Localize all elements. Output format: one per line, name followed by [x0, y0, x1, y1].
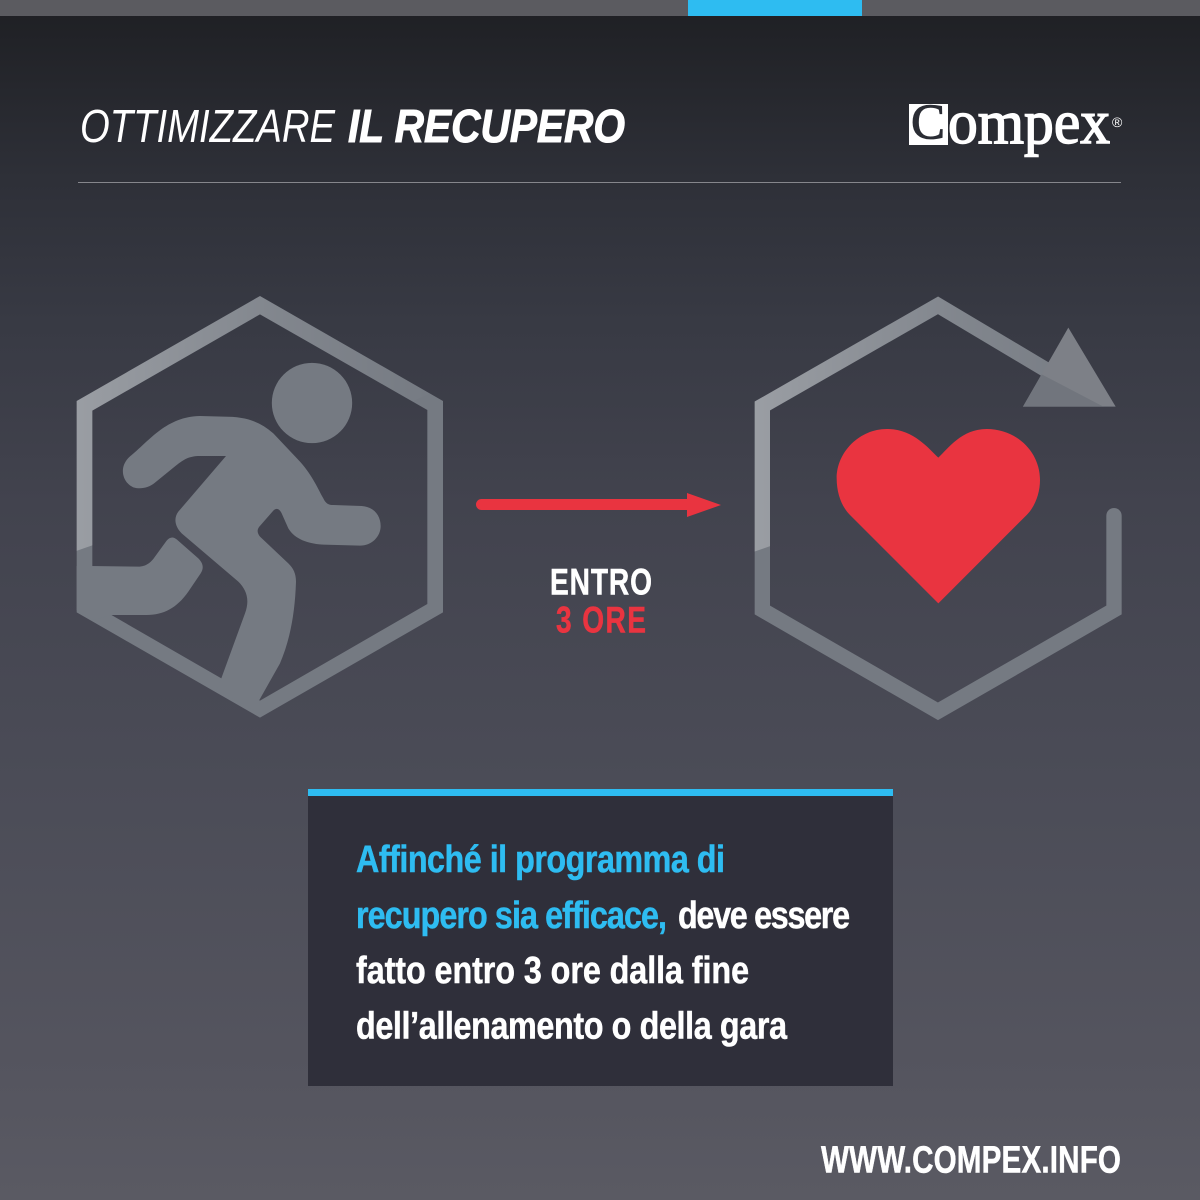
panel text: dell’allenamento o della gara [356, 1005, 787, 1047]
label: entro 3 ore [550, 561, 652, 640]
top progress bar [0, 0, 1200, 16]
ring gloss [754, 296, 1010, 552]
title: OTTIMIZZARE [80, 100, 336, 152]
title [80, 100, 625, 152]
icon: runner in hexagon [77, 296, 443, 718]
logo: Compex: ompex [948, 89, 1110, 157]
hexagon frame [77, 296, 443, 718]
label: entro 3 ore: 3 ORE [556, 599, 646, 640]
ring arrowhead [1023, 328, 1116, 407]
panel text [356, 839, 850, 1047]
header divider [78, 182, 1121, 183]
recovery ring [762, 305, 1114, 711]
runner body [123, 416, 381, 713]
website url: WWW.COMPEX.INFO [821, 1139, 1121, 1181]
panel text: Affinché il programma di [356, 839, 725, 881]
panel text: recupero sia efficace, [356, 895, 667, 937]
arrowhead lower shade [1023, 374, 1103, 407]
hexagon gloss [76, 296, 330, 551]
label: entro 3 ore: ENTRO [550, 561, 652, 602]
panel text: fatto entro 3 ore dalla fine [356, 950, 749, 992]
panel text: deve essere [678, 895, 850, 937]
runner back leg [77, 537, 203, 620]
heart [837, 429, 1040, 603]
logo: Compex: ® [1112, 114, 1123, 130]
arrow: red, towards heart [482, 493, 721, 517]
icon: heart in recovery hexagon [762, 305, 1116, 711]
runner head [272, 363, 352, 443]
logo: Compex: C [911, 93, 945, 149]
title: IL RECUPERO [348, 100, 625, 152]
panel: recovery note [308, 789, 893, 1086]
panel accent bar [308, 789, 893, 796]
